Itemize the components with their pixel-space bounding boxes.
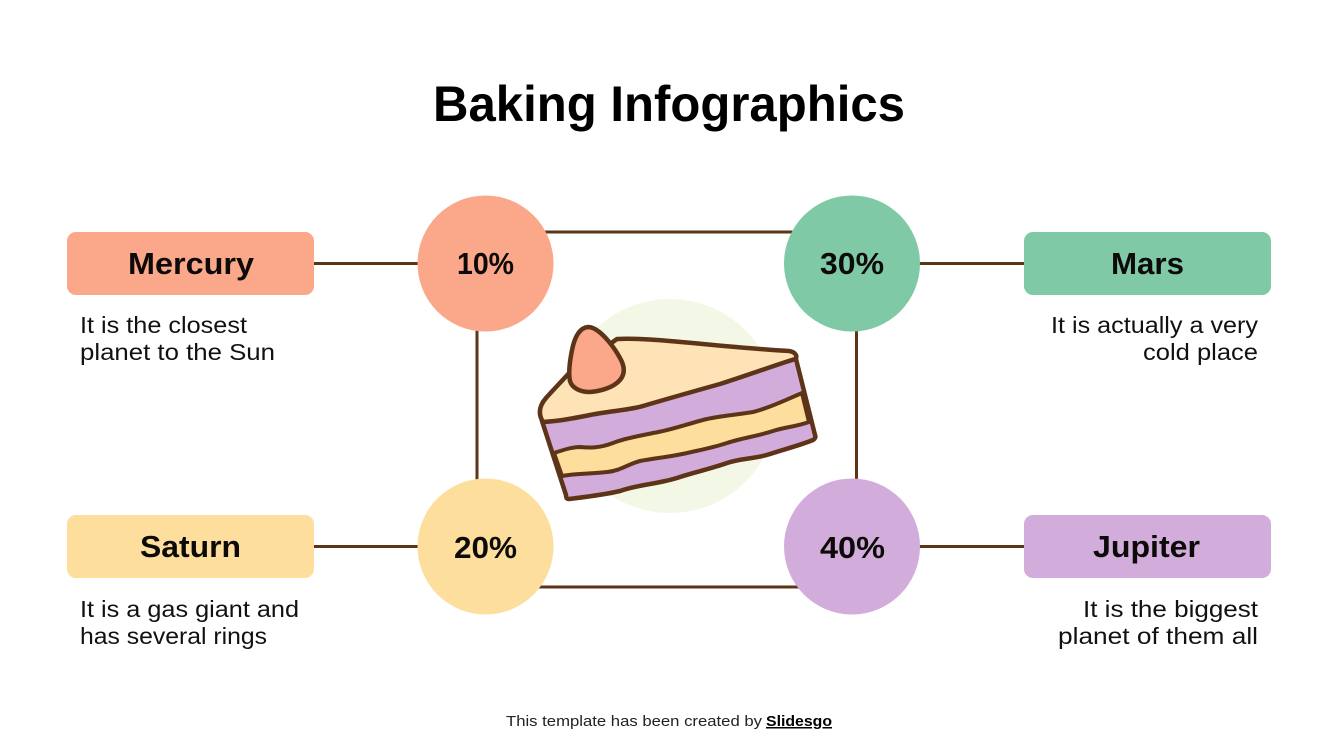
percentage circle: 10% — [418, 196, 554, 332]
percentage circle: 20% — [418, 478, 554, 614]
footer credit: This template has been created by — [506, 713, 763, 730]
Mercury description: It is the closest — [80, 312, 248, 338]
Saturn description: has several rings — [80, 623, 267, 649]
percentage circle: 20%: 20% — [454, 530, 517, 565]
Mercury label box — [67, 232, 314, 295]
percentage circle: 40% — [784, 478, 920, 614]
title: Baking Infographics — [433, 76, 905, 132]
icon: cake slice — [540, 299, 815, 513]
panel: Mercury — [67, 232, 314, 365]
panel: Mars — [1024, 232, 1271, 365]
Mars description: It is actually a very — [1051, 312, 1259, 338]
Saturn label box — [67, 515, 314, 578]
percentage circle: 10%: 10% — [457, 246, 514, 281]
Mercury description — [80, 312, 275, 365]
percentage circle: 40%: 40% — [820, 530, 885, 565]
Saturn description: It is a gas giant and — [80, 596, 299, 622]
Saturn description — [80, 596, 299, 649]
percentage circle: 30%: 30% — [820, 246, 884, 281]
Mercury description: planet to the Sun — [80, 339, 275, 365]
Mars heading: Mars — [1111, 246, 1184, 281]
panel: Jupiter — [1024, 515, 1271, 649]
Saturn heading: Saturn — [140, 529, 241, 564]
Mars label box — [1024, 232, 1271, 295]
Jupiter label box — [1024, 515, 1271, 578]
Mercury heading: Mercury — [128, 246, 255, 281]
Jupiter description — [1058, 596, 1259, 649]
percentage circle: 30% — [784, 196, 920, 332]
Jupiter heading: Jupiter — [1093, 529, 1200, 564]
Jupiter description: It is the biggest — [1083, 596, 1259, 622]
panel: Saturn — [67, 515, 314, 649]
Mars description — [1051, 312, 1259, 365]
footer credit: Slidesgo — [766, 713, 832, 730]
icon: strawberry — [569, 327, 624, 392]
Jupiter description: planet of them all — [1058, 623, 1258, 649]
Mars description: cold place — [1143, 339, 1258, 365]
